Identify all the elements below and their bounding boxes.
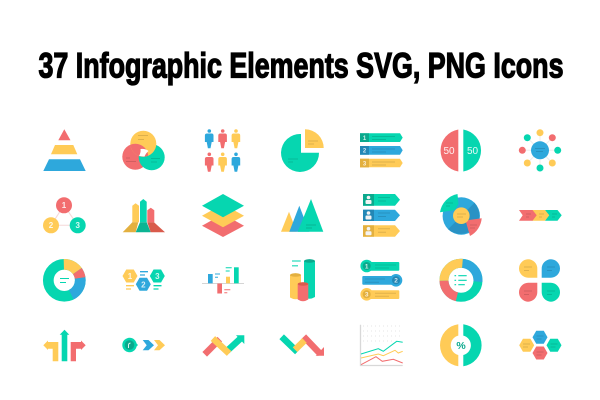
icon: numbered bar list: 3 [365,292,369,299]
icon: mountains [281,199,323,232]
icon: network hub [519,129,561,172]
icon: three direction arrows [43,330,86,361]
icon: numbered hexagons: 1 [128,272,133,281]
icon: hexagon cluster [519,331,562,360]
icon: numbered hexagons [122,270,165,291]
icon: exploded circular diagram [440,194,482,236]
icon: segmented donut [48,264,80,296]
icon: numbered arrow list: 1 [363,136,367,142]
icon: numbered arrow list [360,133,403,167]
icon: pie chart [281,129,324,172]
icon: four petals [519,259,560,302]
icon: numbered bar list: 1 [365,263,369,270]
icon: upward trend arrow [207,335,244,352]
icon: numbered hexagons: 3 [155,272,160,281]
icon: numbered bar list [360,260,402,301]
icon: numbered triangle nodes: 2 [49,221,54,230]
icon: people grid [205,129,240,172]
icon: numbered arrow list: 2 [363,149,367,155]
icon: venn circles [122,131,165,170]
icon: downward trend arrow [284,339,324,356]
icon: percent split donut: % [456,340,466,352]
icon: chevron process [519,210,562,221]
icon: 50 50 split circle: 50 [467,146,478,157]
icon: circular cycle ring [444,263,478,297]
icon: numbered triangle nodes: 3 [75,221,80,230]
icon: profile arrow list [363,194,400,237]
icon: diverging bar chart [202,267,244,294]
icon: numbered bar list: 2 [394,278,398,285]
icon: percent split donut [440,324,482,366]
icon: line chart [360,325,403,366]
icon: cylinder chart [290,259,315,301]
icon: 50 50 split circle [441,130,481,172]
icon: numbered hexagons: 2 [141,280,146,289]
icon: 50 50 split circle: 50 [443,146,455,157]
icon: stacked layers [202,194,244,237]
icon: numbered triangle nodes [43,197,86,233]
icon: numbered triangle nodes: 1 [62,201,67,210]
icon: numbered arrow list: 3 [363,161,367,167]
icon: upward arrow columns [123,199,165,232]
icon: pyramid [43,129,86,171]
icon: pin with chevrons [122,338,165,352]
